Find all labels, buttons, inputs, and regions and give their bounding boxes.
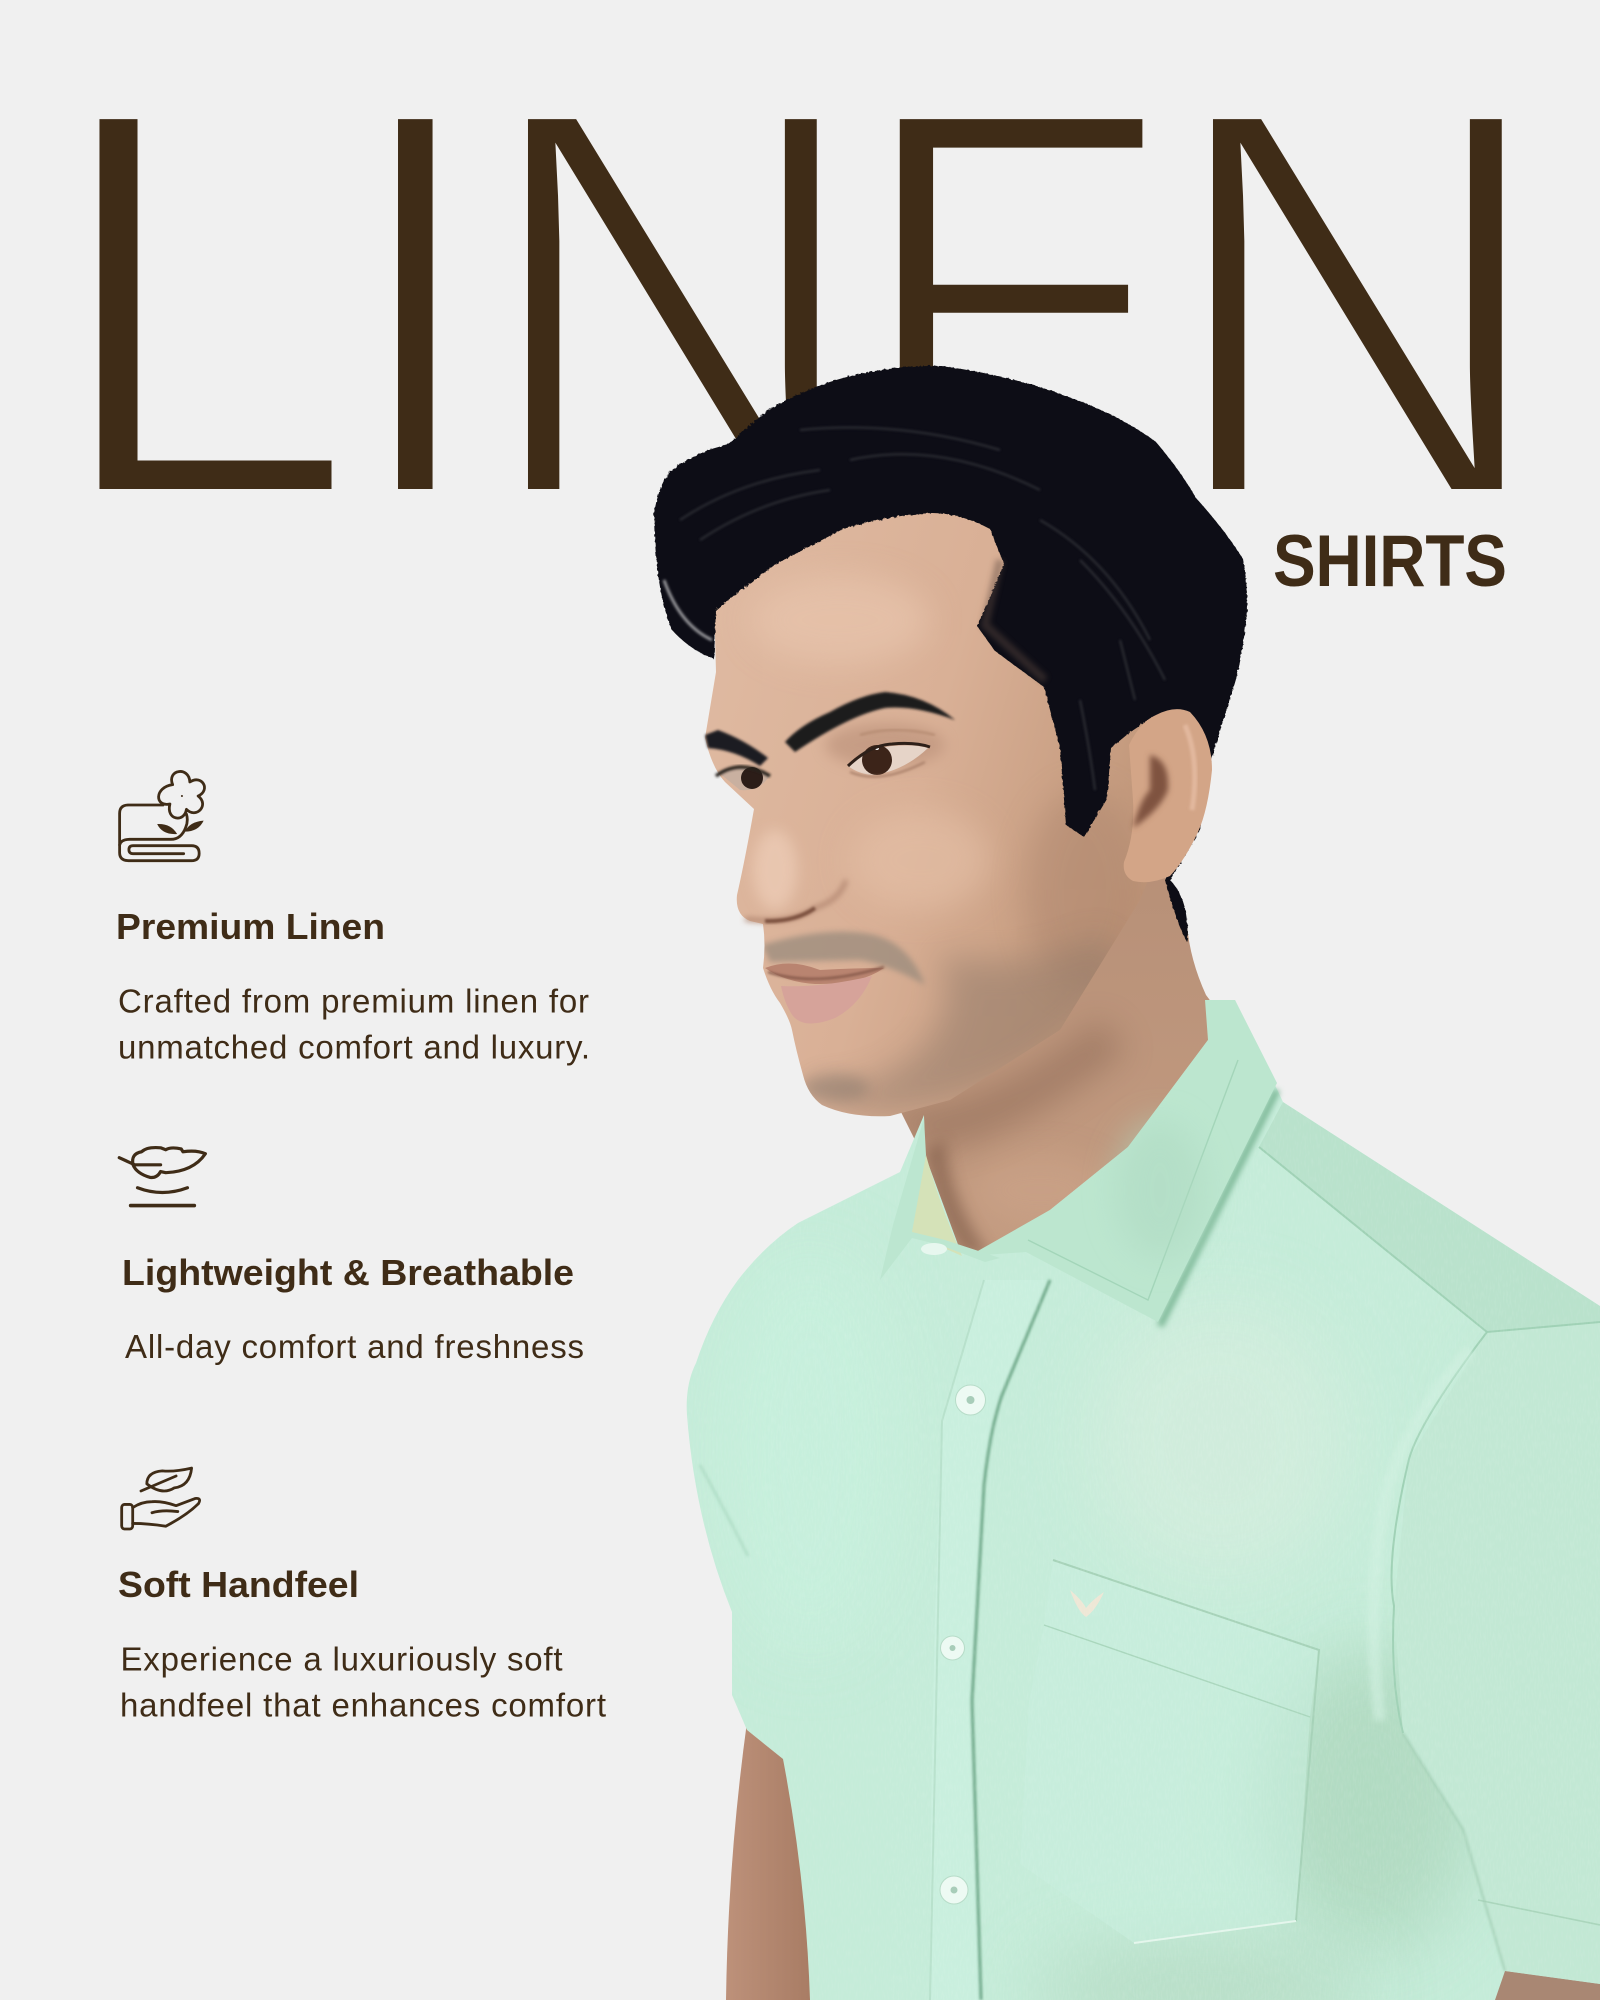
sleeve cuff stitch	[1478, 1900, 1600, 1925]
far eyebrow	[705, 730, 768, 766]
icon: folded linen with flower	[120, 771, 204, 861]
title: LINEN: L	[47, 0, 357, 615]
fabric shading	[1113, 1324, 1327, 1556]
near eye	[848, 730, 935, 777]
seam highlight band	[1374, 1350, 1470, 1720]
feature: Lightweight & Breathable	[119, 1148, 584, 1365]
collar	[880, 1000, 1277, 1326]
description: handfeel that enhances comfort	[120, 1686, 606, 1724]
title: LINEN: N	[1162, 0, 1553, 615]
neck	[902, 878, 1210, 1251]
heading: Lightweight & Breathable	[122, 1252, 574, 1293]
heading: Soft Handfeel	[118, 1564, 359, 1605]
heading: Premium Linen	[116, 906, 385, 947]
collar button	[921, 1243, 947, 1255]
eye socket shadow	[825, 723, 945, 767]
title: LINEN: E	[854, 0, 1179, 615]
hair strands	[680, 428, 1165, 790]
shirt	[680, 1000, 1600, 2000]
nose wing and nostril	[745, 880, 846, 921]
nose highlight	[753, 830, 797, 910]
face	[703, 512, 1152, 1116]
side shadow	[1026, 804, 1132, 954]
description: All-day comfort and freshness	[125, 1328, 584, 1365]
model photo illustration	[654, 366, 1600, 2000]
ear	[1124, 709, 1212, 882]
lips	[765, 963, 884, 1024]
feature: Soft Handfeel	[118, 1468, 606, 1724]
linen texture	[1005, 1302, 1040, 1386]
beard stubble jaw	[810, 935, 1130, 1112]
yoke band	[1259, 1102, 1600, 1332]
arm right	[1485, 1960, 1600, 2000]
buttons	[940, 1385, 986, 1904]
description: unmatched comfort and luxury.	[118, 1028, 590, 1066]
icon: feather	[119, 1148, 205, 1206]
pocket	[1259, 1672, 1316, 1921]
collar shadow	[1160, 1090, 1277, 1326]
collar inner lining	[908, 1155, 962, 1256]
description: Crafted from premium linen for	[118, 982, 589, 1020]
left sleeve fold	[700, 1465, 748, 1556]
chin stubble	[801, 1074, 869, 1102]
near eyebrow	[785, 692, 955, 752]
sleeve right	[1399, 1664, 1600, 1984]
icon: hand with leaf	[122, 1468, 200, 1529]
collar left	[880, 1118, 1000, 1280]
title: LINEN	[47, 0, 1553, 615]
description	[120, 1640, 606, 1724]
moustache stubble	[762, 932, 925, 985]
placket	[930, 1280, 1050, 2000]
description	[118, 982, 590, 1066]
collar right	[969, 1000, 1277, 1322]
description: Experience a luxuriously soft	[120, 1640, 562, 1678]
cheek highlight	[871, 819, 988, 905]
hair	[654, 366, 1247, 942]
forehead highlight	[766, 583, 922, 660]
shirt body	[687, 1000, 1600, 2000]
sleeve seam	[1259, 1147, 1600, 1733]
pocket logo	[1070, 1590, 1104, 1617]
far eye	[716, 767, 770, 790]
title: LINEN: I	[345, 0, 486, 614]
hair front lock highlight	[664, 580, 712, 640]
arm left	[726, 1722, 812, 2000]
title: LINEN: N	[477, 0, 868, 615]
subtitle: SHIRTS: SHIRTS	[1273, 520, 1507, 602]
feature: Premium Linen	[116, 771, 590, 1066]
hairline fade	[985, 560, 1045, 680]
